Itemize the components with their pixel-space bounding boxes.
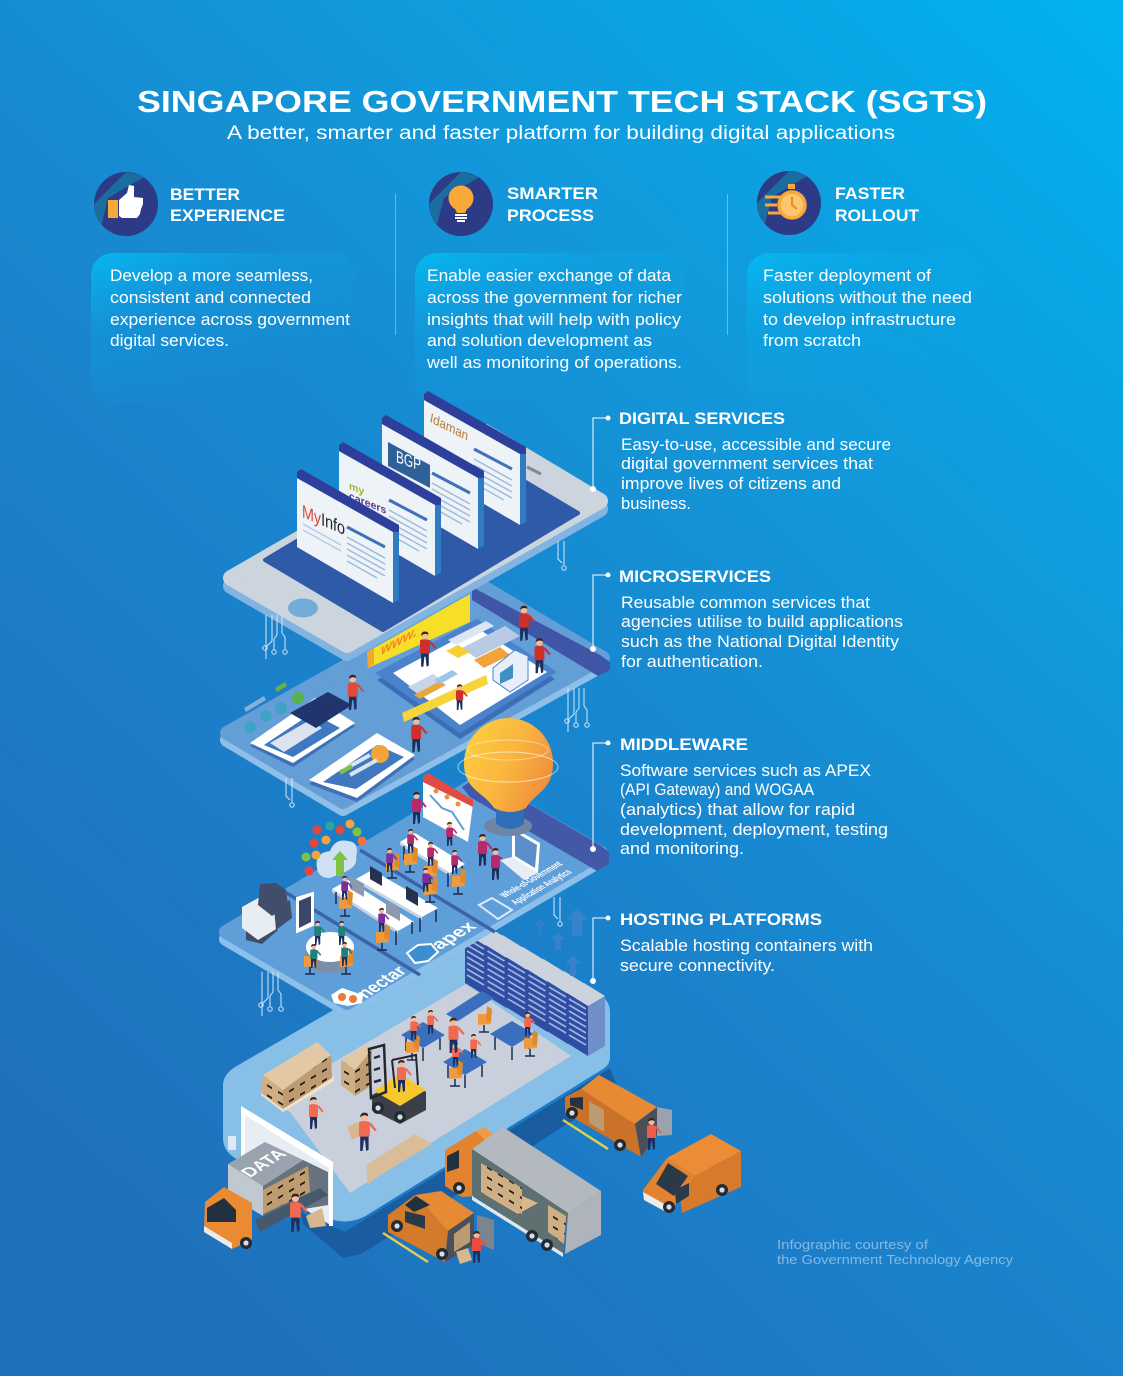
text block: digital services: Easy-to-use, accessible and secure [621, 436, 891, 454]
apex text: apex [426, 919, 482, 953]
warehouse floor [270, 984, 571, 1193]
credit: the Government Technology Agency [777, 1253, 1014, 1267]
text block: middleware: development, deployment, testing [620, 821, 888, 839]
heading: FASTER [835, 184, 905, 203]
heading line 2: PROCESS [507, 206, 594, 225]
tablet screen [299, 896, 311, 928]
ground shadow [300, 1068, 620, 1258]
heading line 2: ROLLOUT [835, 206, 920, 225]
panel: better experience [91, 172, 350, 366]
big truck [445, 1127, 601, 1257]
ruler [402, 675, 488, 722]
window: idaman [424, 391, 526, 525]
lane lines [285, 850, 495, 975]
text block [110, 266, 350, 350]
van upper right [565, 1075, 672, 1157]
connector: digital services [590, 416, 610, 492]
platform edge [226, 789, 601, 1010]
text block: microservices: Reusable common services that [621, 594, 870, 612]
text block: digital services. [110, 331, 229, 350]
text block: Develop a more seamless, [110, 266, 313, 285]
heading: BETTER [170, 185, 240, 204]
navy band [462, 775, 609, 871]
speaker slot [527, 467, 541, 474]
text block: across the government for richer [427, 288, 682, 307]
icon: stopwatch [757, 171, 821, 235]
navy band [472, 587, 610, 676]
text block: digital services: improve lives of citizens and [621, 475, 841, 493]
data truck [204, 1142, 328, 1249]
heading line 2: EXPERIENCE [170, 206, 285, 225]
analytics text line one: Whole-of-Government [497, 860, 566, 899]
warehouse people and desks [309, 991, 538, 1151]
loading dock [228, 1106, 333, 1226]
text block: middleware: MIDDLEWARE [620, 735, 748, 754]
text block: digital services: digital government services that [621, 455, 873, 473]
left phones [250, 692, 415, 802]
tablet [297, 893, 313, 932]
illustration: microservices layer [227, 587, 610, 809]
text block: digital services: business. [621, 495, 691, 513]
circuit traces [286, 688, 589, 807]
window: myinfo [297, 469, 399, 603]
illustration: digital services phone [231, 391, 600, 659]
divider [394, 194, 396, 335]
circuit traces [259, 897, 562, 1016]
text block: Enable easier exchange of data [427, 266, 672, 285]
web panel [377, 620, 555, 739]
panel: faster rollout [747, 171, 971, 346]
platform edge [227, 595, 603, 809]
text block: microservices [619, 567, 903, 671]
mycareersfuture logo [349, 480, 386, 524]
text block: microservices: such as the National Digital Identity [621, 633, 900, 651]
heading: SMARTER [507, 184, 598, 203]
text block: insights that will help with policy [427, 310, 682, 329]
van right [643, 1134, 741, 1213]
text block: middleware: (API Gateway) and WOGAA [620, 781, 814, 799]
icon: light bulb [429, 172, 493, 236]
www label: www. [381, 623, 417, 659]
light bulb [458, 718, 558, 836]
phone screen [265, 443, 578, 630]
label: whole-of-government application analytics [479, 860, 575, 919]
website banner [367, 594, 470, 668]
circuit traces [263, 541, 566, 659]
parking line [383, 1120, 608, 1262]
credit: Infographic courtesy of [777, 1238, 929, 1252]
text block: to develop infrastructure [763, 310, 956, 329]
title: SINGAPORE GOVERNMENT TECH STACK (SGTS) [137, 84, 987, 119]
text block: middleware [620, 735, 888, 858]
laptop [500, 827, 540, 880]
text block: experience across government [110, 310, 350, 329]
phone body [231, 432, 600, 645]
window: bgp [382, 415, 484, 549]
text block: microservices: for authentication. [621, 653, 763, 671]
text block: and solution development as [427, 331, 652, 350]
block stack [242, 883, 292, 944]
myinfo logo: MyInfo [302, 501, 345, 539]
crate stacks [261, 1042, 372, 1112]
workstations [332, 848, 438, 950]
nectar text: nectar [353, 963, 412, 1002]
text block: hosting platforms [620, 910, 873, 975]
data label: DATA [236, 1146, 291, 1180]
text block: middleware: Software services such as APEX [620, 762, 871, 780]
app icons [244, 682, 304, 733]
connector: middleware [590, 741, 610, 852]
card background [91, 253, 355, 403]
text block: well as monitoring of operations. [426, 353, 682, 372]
illustration: middleware layer [226, 773, 609, 1016]
text block: microservices: agencies utilise to build applications [621, 613, 903, 631]
mycareersfuture logo: careers [349, 490, 386, 517]
label: nectar [331, 963, 412, 1006]
whiteboard [423, 773, 473, 842]
van front [388, 1191, 494, 1264]
text block: digital services [619, 409, 891, 513]
phone two [309, 737, 415, 802]
phone edge [231, 440, 600, 653]
card background [747, 253, 979, 403]
text block: Faster deployment of [763, 266, 931, 285]
connector: hosting platforms [590, 916, 610, 984]
card background [415, 253, 685, 403]
mycareersfuture logo: my [349, 480, 364, 498]
text block [763, 266, 972, 350]
label: apex [407, 919, 482, 963]
building base [223, 925, 610, 1222]
panel: smarter process [415, 172, 682, 372]
text block: microservices: MICROSERVICES [619, 567, 771, 586]
server racks [465, 923, 605, 1056]
analytics text line two: Application Analytics [508, 868, 575, 906]
home button [288, 598, 318, 618]
connector: microservices [590, 573, 610, 652]
icon: thumbs up [94, 172, 158, 236]
divider [726, 194, 728, 335]
text block: consistent and connected [110, 288, 311, 307]
subtitle: A better, smarter and faster platform for building digital applications [227, 123, 895, 144]
text block: from scratch [763, 331, 861, 350]
credit [777, 1238, 1014, 1267]
text block: hosting platforms: HOSTING PLATFORMS [620, 910, 822, 929]
text block [426, 266, 682, 372]
text block: middleware: and monitoring. [620, 840, 744, 858]
platform top [226, 782, 601, 1003]
round table [304, 921, 354, 974]
meeting table [400, 792, 505, 894]
text block: hosting platforms: Scalable hosting containers with [620, 937, 873, 955]
window: mycareersfuture [339, 442, 441, 576]
cloud and app icons [302, 820, 366, 878]
platform top [227, 588, 603, 802]
text block: digital services: DIGITAL SERVICES [619, 409, 785, 428]
people [348, 606, 550, 752]
text block: hosting platforms: secure connectivity. [620, 957, 775, 975]
forklift [369, 1045, 426, 1124]
idaman logo: Idaman [430, 411, 468, 445]
text block: middleware: (analytics) that allow for rapid [620, 801, 855, 819]
up arrows [534, 908, 588, 976]
text block: solutions without the need [763, 288, 972, 307]
flat pallets [366, 1134, 432, 1184]
illustration: hosting platforms layer [204, 908, 741, 1264]
mycareersfuture logo: future [349, 500, 379, 524]
bgp logo: BGP [396, 446, 421, 475]
